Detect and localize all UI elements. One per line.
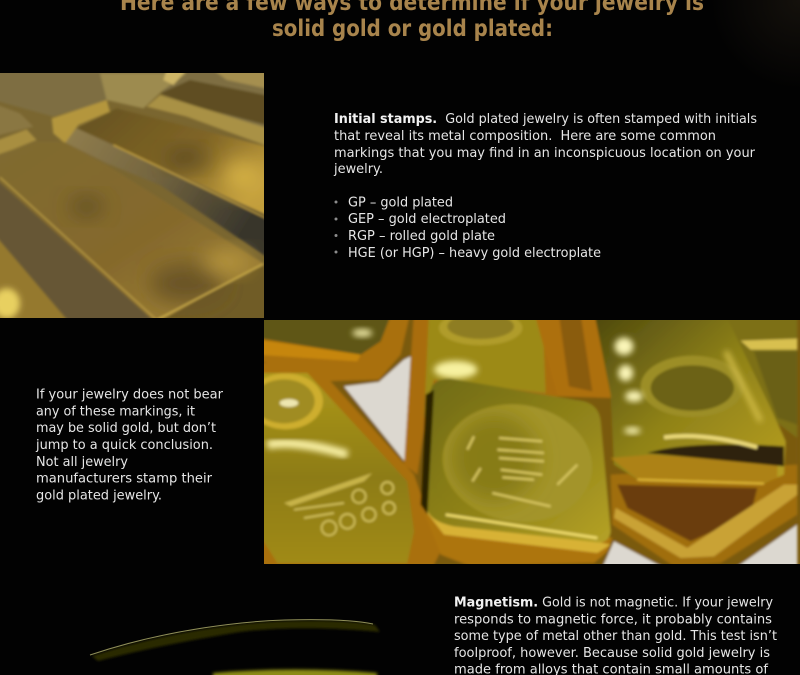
ring highlight arc [90, 620, 380, 661]
right ingot [594, 311, 786, 485]
text block: no markings: may be solid gold, but don’t [36, 421, 216, 436]
title: solid gold or gold plated: [272, 16, 553, 42]
title [120, 0, 704, 42]
back-left ingot [264, 320, 410, 382]
far-right ingot [728, 320, 799, 438]
text block: no markings: gold plated jewelry. [36, 488, 162, 504]
text block: no markings: jump to a quick conclusion. [35, 438, 213, 453]
left ingot [264, 362, 440, 564]
photo: gold ring on black [90, 620, 380, 675]
list of gold plating markings: HGE (or HGP) – heavy gold electroplate [348, 246, 601, 261]
text block: initial stamps [333, 112, 757, 261]
text block: initial stamps: Initial stamps. Gold plated jewelry is often stamped with initials [334, 112, 757, 127]
text block: magnetism: responds to magnetic force, it probably contains [454, 612, 772, 628]
text block: magnetism: foolproof, however. Because solid gold jewelry is [454, 646, 770, 661]
table gaps [344, 356, 411, 461]
text block: magnetism [454, 596, 777, 675]
list of gold plating markings [334, 196, 601, 261]
list of gold plating markings: GP – gold plated [348, 196, 453, 210]
back-centre ingot [404, 311, 557, 475]
ring lower glow [213, 670, 377, 675]
photo: stacked gold bars [0, 70, 273, 323]
orange strip [536, 320, 612, 399]
text block: initial stamps: that reveal its metal composition. Here are some common [334, 129, 716, 144]
text block: no markings: manufacturers stamp their [36, 472, 212, 486]
list of gold plating markings: RGP – rolled gold plate [348, 229, 495, 244]
lower-right ingot [611, 465, 797, 566]
front square ingot [421, 379, 612, 566]
text block: magnetism: some type of metal other than gold. This test isn’t [454, 629, 777, 644]
text block: initial stamps: markings that you may find in an inconspicuous location on your [334, 146, 755, 161]
list of gold plating markings: GEP – gold electroplated [348, 212, 506, 227]
photo: pile of gold ingots [248, 311, 800, 571]
text block: no markings: Not all jewelry [36, 455, 128, 470]
text block: no markings: If your jewelry does not bear [36, 388, 223, 402]
text block: no markings [35, 388, 223, 504]
text block: magnetism: Magnetism. Gold is not magnetic. If your jewelry [454, 596, 773, 611]
text block: initial stamps: jewelry. [333, 162, 383, 177]
text block: no markings: any of these markings, it [36, 404, 195, 420]
